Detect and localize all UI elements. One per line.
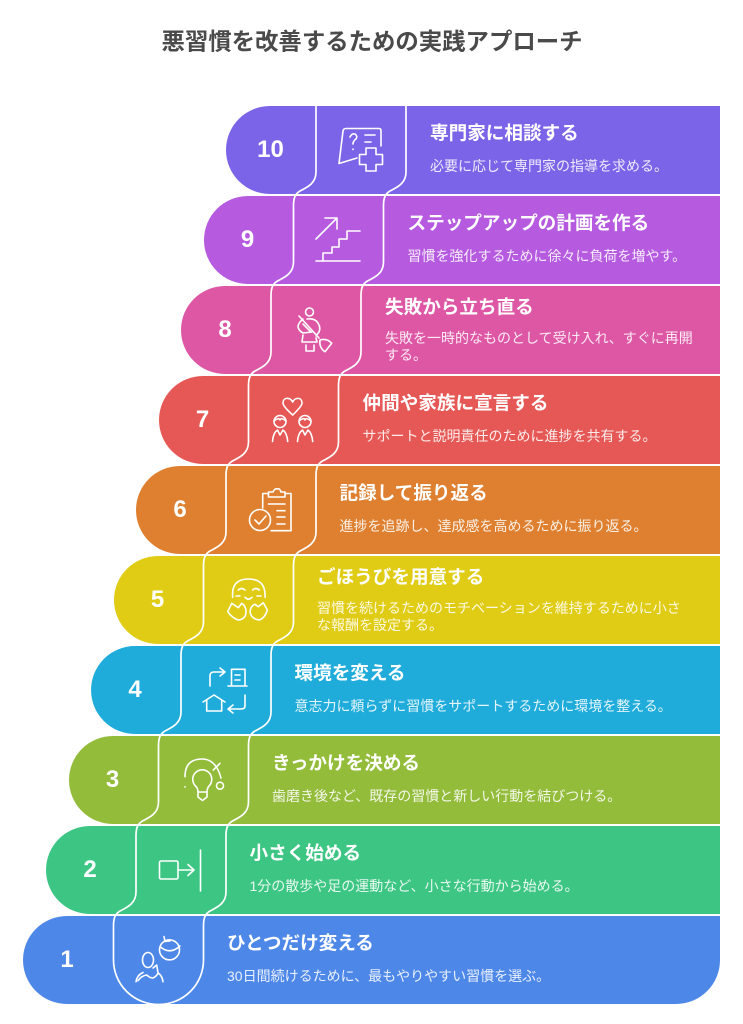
icon: person with broom <box>298 308 332 352</box>
heading 10: 専門家に相談する <box>430 122 579 144</box>
panel: step 8: する。 <box>385 347 427 363</box>
description 2: 1分の散歩や足の運動など、小さな行動から始める。 <box>250 878 579 894</box>
panel: step 5 <box>114 556 720 644</box>
number 2: 2 <box>83 856 97 883</box>
icon: question bubble with plus <box>339 128 382 171</box>
icon: stairs with arrow <box>316 218 360 261</box>
heading 9: ステップアップの計画を作る <box>408 212 649 234</box>
heading 2: 小さく始める <box>250 842 361 864</box>
description 3: 歯磨き後など、既存の習慣と新しい行動を結びつける。 <box>272 788 621 804</box>
icon: home and door with arrows <box>203 668 247 713</box>
number 10: 10 <box>257 136 284 163</box>
icon: box and arrow to line <box>160 850 200 891</box>
description 9: 習慣を強化するために徐々に負荷を増やす。 <box>408 248 686 264</box>
connector: left winding line <box>114 106 316 1004</box>
panel: step 7 <box>159 376 720 464</box>
number 7: 7 <box>196 406 209 433</box>
heading 3: きっかけを決める <box>272 752 420 774</box>
panel: step 3 <box>69 736 720 824</box>
panel: step 10 <box>226 106 720 194</box>
description 1: 30日間続けるために、最もやりやすい習慣を選ぶ。 <box>227 968 550 984</box>
number 8: 8 <box>218 316 232 343</box>
number 3: 3 <box>106 766 119 793</box>
description 5: 習慣を続けるためのモチベーションを維持するために小さ <box>317 600 681 616</box>
panel: step 1 <box>23 916 720 1004</box>
panel: step 8 <box>181 286 720 374</box>
description 10: 必要に応じて専門家の指導を求める。 <box>430 158 668 174</box>
description 8: 失敗を一時的なものとして受け入れ、すぐに再開 <box>385 330 693 346</box>
panel: step 4 <box>91 646 720 734</box>
number 5: 5 <box>151 586 164 613</box>
description 6: 進捗を追跡し、達成感を高めるために振り返る。 <box>340 518 648 534</box>
heading 7: 仲間や家族に宣言する <box>362 392 548 414</box>
panel: step 2 <box>46 826 720 914</box>
title: 悪習慣を改善するための実践アプローチ <box>161 28 583 54</box>
description 7: サポートと説明責任のために進捗を共有する。 <box>362 428 656 444</box>
icon: person and cycle <box>136 936 180 982</box>
number 1: 1 <box>60 946 74 973</box>
heading 6: 記録して振り返る <box>340 482 488 504</box>
icon: smiling face with hands <box>228 579 267 620</box>
number 9: 9 <box>241 226 254 253</box>
connector: right winding line <box>204 106 406 960</box>
heading 4: 環境を変える <box>294 662 406 684</box>
heading 1: ひとつだけ変える <box>227 932 374 954</box>
description 4: 意志力に頼らずに習慣をサポートするために環境を整える。 <box>294 698 672 714</box>
panel: step 6 <box>136 466 720 554</box>
heading 8: 失敗から立ち直る <box>385 296 534 318</box>
number 6: 6 <box>173 496 187 523</box>
icon: two people and heart <box>272 398 313 442</box>
panel: step 9 <box>204 196 720 284</box>
number 4: 4 <box>128 676 142 703</box>
icon: light bulb <box>185 759 224 800</box>
heading 5: ごほうびを用意する <box>317 566 484 588</box>
panel: step 5: な報酬を設定する。 <box>317 617 443 633</box>
icon: clipboard with check <box>250 489 291 531</box>
